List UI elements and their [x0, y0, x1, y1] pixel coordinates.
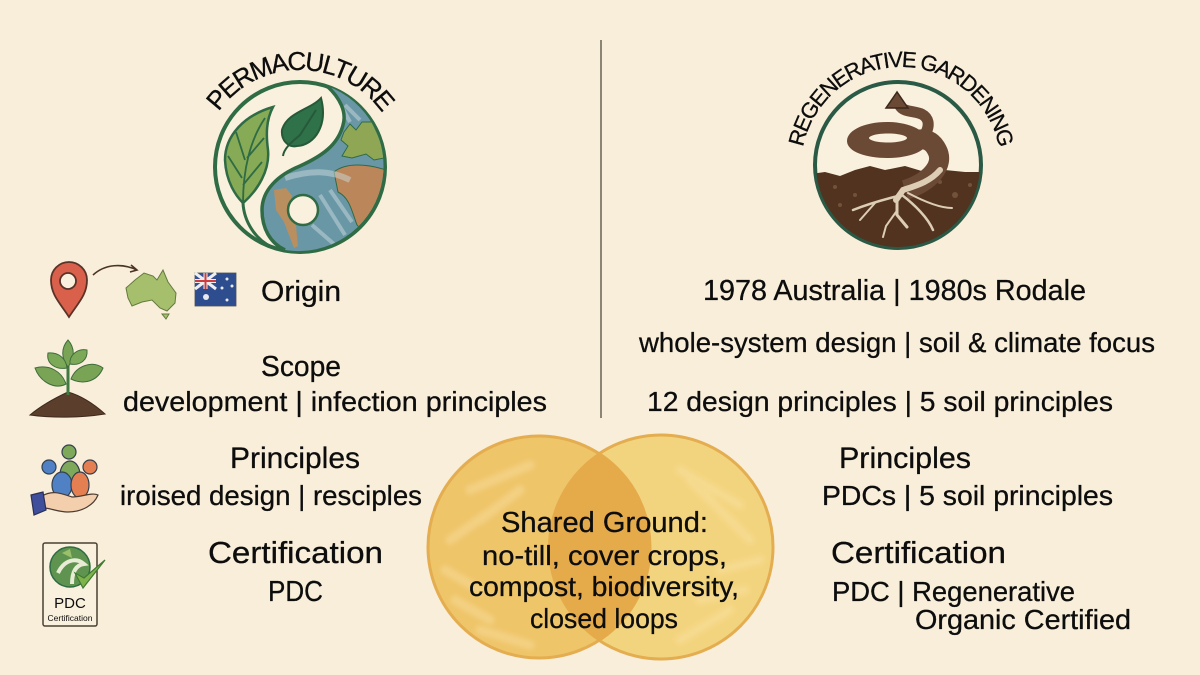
text: shared ground: closed loops	[530, 603, 678, 634]
text: shared ground: Shared Ground:	[501, 507, 708, 539]
text: scope details: development | infection principles	[123, 386, 547, 417]
icon: PDC certification badge: Certification	[48, 613, 93, 623]
text: principles details right: PDCs | 5 soil principles	[822, 480, 1113, 511]
heading: Regenerative Gardening: REGENERATIVE GARDENING	[788, 51, 1013, 146]
icon: PDC certification badge: PDC	[54, 595, 86, 612]
label: Origin: Origin	[261, 276, 341, 308]
text: certification detail right: Organic Certified	[915, 604, 1131, 635]
text: principles details left: iroised design | resciples	[120, 480, 422, 511]
text: principles comparison: 12 design principles | 5 soil principles	[647, 386, 1113, 417]
label: Scope: Scope	[261, 351, 341, 383]
panel: permaculture emblem	[206, 52, 396, 254]
label: Principles left: Principles	[230, 442, 360, 475]
icon: Australia map	[126, 270, 176, 319]
icon: location pin	[51, 262, 87, 317]
text: scope comparison: whole-system design | soil & climate focus	[638, 327, 1155, 358]
icon: PDC certification badge	[43, 543, 105, 626]
icon: Australian flag	[195, 273, 236, 306]
panel: regenerative gardening emblem	[788, 51, 1013, 250]
arrow: pin to Australia	[93, 265, 137, 275]
text: certification detail left: PDC	[268, 576, 323, 608]
label: Certification left: Certification	[208, 535, 383, 570]
heading: Permaculture: PERMACULTURE	[206, 52, 396, 112]
icon: seedling in soil	[30, 340, 105, 417]
text: certification detail right: PDC | Regenerative	[832, 576, 1075, 607]
text: shared ground: no-till, cover crops,	[482, 540, 727, 571]
icon: yin-yang earth and leaves	[215, 82, 386, 252]
label: Certification right: Certification	[831, 535, 1006, 570]
text: shared ground	[469, 507, 739, 634]
venn diagram: shared ground	[428, 434, 774, 660]
icon: soil spiral with roots	[810, 82, 985, 255]
text: certification detail right	[832, 576, 1131, 635]
icon: people in a hand	[31, 445, 98, 515]
text: shared ground: compost, biodiversity,	[469, 571, 739, 602]
text: origin comparison: 1978 Australia | 1980s Rodale	[703, 275, 1086, 307]
center divider	[600, 40, 602, 418]
label: Principles right: Principles	[839, 442, 971, 475]
